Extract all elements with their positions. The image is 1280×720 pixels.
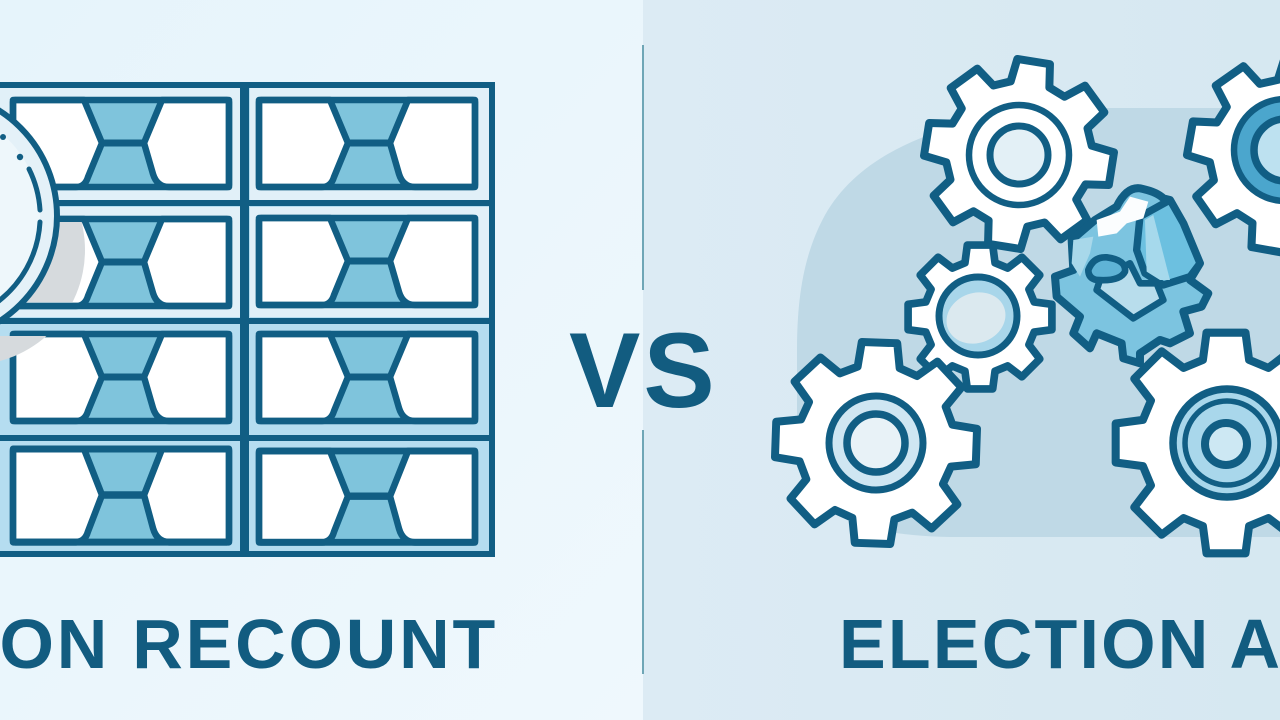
ballot cell row 1 right xyxy=(259,100,475,187)
ballot table illustration xyxy=(0,85,492,554)
table background xyxy=(0,85,492,554)
gear top right xyxy=(1173,43,1280,267)
broken gear center xyxy=(1097,263,1163,318)
gear top xyxy=(912,47,1126,261)
broken gear base xyxy=(1055,188,1208,363)
broken gear white fragments xyxy=(1097,197,1148,237)
broken gear left shard xyxy=(1072,237,1093,277)
divider line bottom xyxy=(642,430,644,674)
ballot cell row 4 left xyxy=(13,449,229,542)
magnifier shadow xyxy=(0,222,85,361)
gear bottom right xyxy=(1116,333,1280,553)
panel: right background xyxy=(643,0,1280,720)
VS label: VS xyxy=(569,310,718,430)
gear small with lens xyxy=(908,245,1052,389)
ballot cell row 3 left xyxy=(13,334,229,421)
table horizontal divider 3 xyxy=(0,435,492,441)
broken gear tall shard xyxy=(1137,200,1200,285)
top row lighter cell backgrounds xyxy=(0,88,489,317)
broken gear shard highlight xyxy=(1145,215,1170,280)
icon: magnifying glass xyxy=(0,91,57,341)
panel: right backdrop blob xyxy=(797,108,1280,537)
ballot cell row 3 right xyxy=(259,334,475,421)
divider line top xyxy=(642,45,644,290)
broken gear xyxy=(1055,188,1208,363)
gears illustration xyxy=(772,43,1280,553)
table vertical divider xyxy=(240,85,249,554)
ballot cell row 4 right xyxy=(259,451,475,542)
ballot cell row 2 left xyxy=(13,219,229,306)
panel: left background xyxy=(0,0,643,720)
table horizontal divider 2 xyxy=(0,318,492,324)
gear bottom left xyxy=(772,339,980,547)
ballot cell row 2 right xyxy=(259,218,475,305)
broken gear oval xyxy=(1088,257,1125,280)
ballot cell row 1 left xyxy=(13,100,229,187)
table horizontal divider 1 xyxy=(0,200,492,206)
